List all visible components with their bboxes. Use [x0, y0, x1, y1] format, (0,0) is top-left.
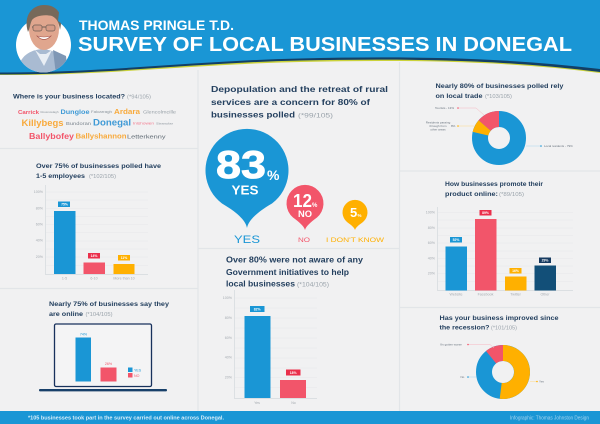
- panel: business location word cloud: [13, 94, 176, 141]
- donut chart: recession: No: [460, 375, 465, 379]
- heading: depopulation: services are a concern for 80% of: [211, 97, 370, 107]
- heading: local trade: on local trade: [436, 93, 483, 100]
- heading: recession: the recession?: [440, 324, 490, 332]
- bar chart: government: 18%: [290, 371, 297, 375]
- bar chart: promotion: 29%: [542, 259, 548, 263]
- bar chart: government: No: [291, 401, 296, 405]
- word cloud: Rossnowlagh: [40, 110, 59, 114]
- footer bar: [0, 411, 600, 424]
- pin: 83% yes: YES: [232, 182, 259, 198]
- heading: online: (*104/105): [86, 312, 113, 318]
- word cloud: Letterkenny: [127, 134, 166, 140]
- label: i don't know: I DON'T KNOW: [326, 237, 385, 244]
- title: name: THOMAS PRINGLE T.D.: [79, 17, 234, 33]
- word cloud: Bundoran: [66, 121, 91, 126]
- pin: 83% yes: [206, 129, 288, 228]
- pin: 5% don't know: 5: [350, 205, 357, 220]
- bar chart: promotion: 16%: [512, 269, 519, 273]
- bar chart: employees: More than 10: [113, 276, 135, 280]
- panel: depopulation: [206, 84, 388, 246]
- bar chart: promotion: [426, 207, 573, 296]
- icon: laptop chart: NO: [134, 374, 140, 378]
- bar chart: government: 40%: [225, 356, 233, 360]
- heading: recession: (*101/105): [491, 326, 517, 332]
- heading: recession: Has your business improved since: [440, 315, 559, 322]
- note: location sample: (*94/105): [127, 94, 151, 100]
- bar chart: government: 60%: [225, 336, 233, 340]
- bar chart: government: Yes: [254, 401, 260, 405]
- heading: promotion: (*89/105): [499, 192, 524, 198]
- bar chart: promotion: Facebook: [478, 292, 494, 296]
- icon: laptop chart: 74%: [80, 332, 88, 336]
- heading: depopulation: businesses polled: [211, 110, 295, 120]
- pin: 83% yes: 83: [216, 144, 266, 187]
- pin: 12% no: 12: [293, 191, 312, 211]
- heading: depopulation: (*99/105): [298, 112, 333, 120]
- donut chart: recession: [440, 342, 544, 399]
- heading: local trade: (*103/105): [485, 94, 512, 100]
- heading: employees: Over 75% of businesses polled have: [36, 163, 162, 170]
- heading: government: Over 80% were not aware of any: [226, 256, 364, 264]
- pin: 5% don't know: %: [358, 213, 362, 218]
- bar chart: employees: 75%: [61, 203, 68, 207]
- donut chart: customers: 8%: [451, 124, 456, 128]
- donut chart: recession: Yes: [539, 380, 544, 384]
- bar chart: government: 100%: [223, 296, 233, 300]
- bar chart: employees: 11%: [121, 256, 127, 260]
- heading: local trade: Nearly 80% of businesses polled rely: [436, 83, 564, 90]
- bar chart: government: 82%: [254, 308, 261, 312]
- bar chart: government: 80%: [225, 316, 233, 320]
- panel: local trade: [426, 83, 573, 157]
- bar chart: employees: 20%: [36, 255, 44, 259]
- heading: government: (*104/105): [297, 282, 329, 288]
- donut chart: customers: Local residents - 79%: [544, 144, 573, 148]
- heading: government: local businesses: [226, 280, 296, 288]
- word cloud: Carrick: [18, 110, 40, 116]
- bar chart: employees: 6-10: [90, 276, 98, 280]
- title: survey: SURVEY OF LOCAL BUSINESSES IN DONEGAL: [78, 33, 572, 56]
- heading: depopulation: Depopulation and the retreat of rural: [211, 84, 388, 94]
- word cloud: Glencolmcille: [143, 110, 176, 114]
- bar chart: promotion: Other: [540, 292, 550, 296]
- panel: online: [39, 301, 170, 391]
- word cloud: Donegal: [93, 118, 131, 128]
- donut chart: customers: Residents passing: [426, 120, 451, 124]
- heading: online: Nearly 75% of businesses say they: [49, 301, 170, 308]
- footnote: *105 businesses took part in the survey carried out online across Donegal.: [28, 416, 225, 422]
- heading: employees: 1-5 employees: [36, 173, 86, 180]
- heading: government: Government initiatives to help: [226, 268, 349, 277]
- heading: location: Where is your business located?: [13, 94, 125, 100]
- word cloud: Killybegs: [22, 118, 64, 129]
- bar chart: promotion: 80%: [428, 226, 436, 230]
- bar chart: employees: 80%: [36, 206, 44, 210]
- panel: recession: [440, 315, 559, 399]
- heading: promotion: How businesses promote their: [445, 181, 544, 188]
- donut chart: customers: through from: [429, 124, 447, 128]
- word cloud: Ballyshannon: [76, 132, 127, 140]
- panel: government initiatives: [223, 256, 364, 405]
- word cloud: Dungloe: [60, 109, 90, 116]
- bar chart: promotion: Twitter: [510, 292, 522, 296]
- bar chart: promotion: 40%: [428, 256, 436, 260]
- word cloud: Inishowen: [133, 122, 154, 126]
- bar chart: employees: [34, 185, 148, 280]
- word cloud: Falcarragh: [91, 110, 112, 114]
- credit: Infographic: Thomas Johnston Design: [510, 416, 589, 422]
- icon: laptop chart: YES: [134, 368, 142, 372]
- bar chart: government: 20%: [225, 376, 233, 380]
- icon: laptop chart: [39, 324, 167, 391]
- word cloud: Ballybofey: [29, 132, 75, 141]
- pin: 5% don't know: [342, 200, 368, 230]
- header banner: [0, 0, 600, 75]
- heading: employees: (*102/105): [89, 174, 116, 180]
- bar chart: employees: 100%: [34, 190, 44, 194]
- bar chart: promotion: 52%: [453, 238, 459, 242]
- bar chart: employees: 1-5: [62, 276, 67, 280]
- pin: 12% no: [286, 185, 323, 230]
- pin: 12% no: %: [312, 203, 318, 209]
- panel: employees: [34, 163, 162, 280]
- panel: promotion: [426, 181, 573, 296]
- heading: promotion: product online:: [445, 191, 498, 198]
- heading: online: are online: [49, 311, 84, 318]
- word cloud: Stranolar: [156, 122, 173, 126]
- pin: 83% yes: %: [267, 167, 280, 183]
- donut chart: recession: It's gotten worse: [440, 342, 462, 346]
- bar chart: employees: 14%: [91, 254, 97, 258]
- portrait photo: [16, 5, 71, 75]
- bar chart: government: [223, 290, 317, 405]
- word cloud: [18, 107, 176, 141]
- icon: laptop chart: 26%: [105, 362, 113, 366]
- donut chart: customers: [426, 106, 573, 157]
- pin: 12% no: NO: [298, 209, 312, 219]
- bar chart: employees: 60%: [36, 222, 44, 226]
- donut chart: customers: other areas: [430, 128, 446, 132]
- donut chart: customers: Tourists - 13%: [435, 106, 454, 110]
- bar chart: employees: 40%: [36, 238, 44, 242]
- bar chart: promotion: 60%: [428, 241, 436, 245]
- label: no: NO: [298, 237, 310, 244]
- bar chart: promotion: Website: [450, 292, 462, 296]
- bar chart: promotion: 100%: [426, 210, 436, 214]
- bar chart: promotion: 20%: [428, 272, 436, 276]
- bar chart: promotion: 89%: [482, 211, 489, 215]
- label: yes: YES: [234, 234, 260, 246]
- word cloud: Ardara: [114, 107, 141, 116]
